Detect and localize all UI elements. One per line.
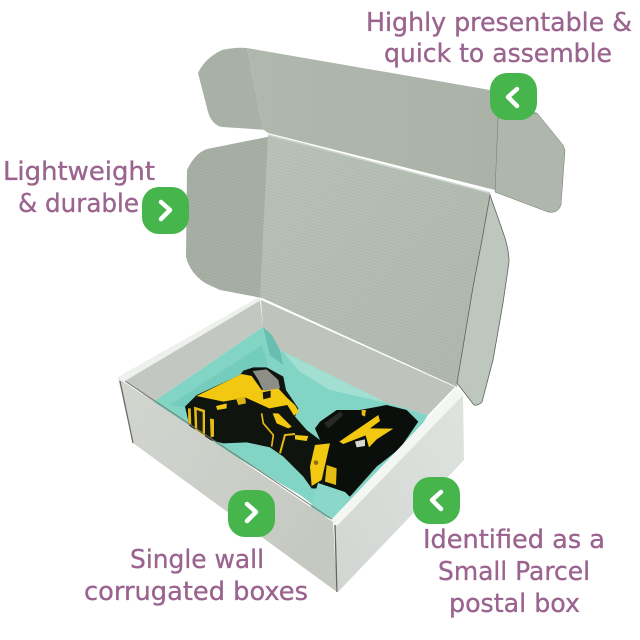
lid left tab [198,48,268,130]
lid top panel [247,48,537,190]
chuck [253,369,280,391]
battery [312,405,418,497]
callout: single wall [84,490,308,607]
left side flap [186,137,268,298]
front tissue fold [310,483,350,520]
yellow housing [197,374,299,416]
white rim left [118,297,261,381]
callout: lightweight [3,157,189,234]
box right face [335,394,464,592]
inner back wall [261,300,455,415]
icon: right chevron button [142,187,189,234]
grip accents [273,413,292,428]
battery label [339,415,393,447]
base yellow plate [310,443,330,486]
white rim front [125,381,333,520]
lid right tab [495,113,565,212]
callout: small parcel: postal box [449,589,580,619]
power drill [185,367,418,497]
inner left wall [125,300,263,402]
text: Single wall [130,545,264,575]
hinge highlight [268,135,490,193]
right side flap [457,195,509,405]
box front left face [118,378,337,592]
box corner fold dark edge [120,381,133,443]
callout: small parcel [413,477,605,619]
icon: left chevron button [490,73,537,120]
text: Lightweight [3,157,155,187]
text: Identified as a [423,525,605,555]
white rim right [331,387,464,526]
callout: highly presentable: quick to assemble [384,39,612,69]
rear stripes [188,408,191,425]
callout: highly presentable [366,8,632,120]
callout: small parcel: Small Parcel [438,557,590,587]
cardboard box with drill [118,48,565,592]
tissue paper [153,327,428,520]
drill body [185,367,328,488]
text: Highly presentable & [366,8,632,38]
icon: left chevron button [413,477,460,524]
icon: right chevron button [228,490,275,537]
callout: single wall: corrugated boxes [84,577,308,607]
inside lid back panel [260,135,490,387]
callout: lightweight: & durable [18,189,139,219]
